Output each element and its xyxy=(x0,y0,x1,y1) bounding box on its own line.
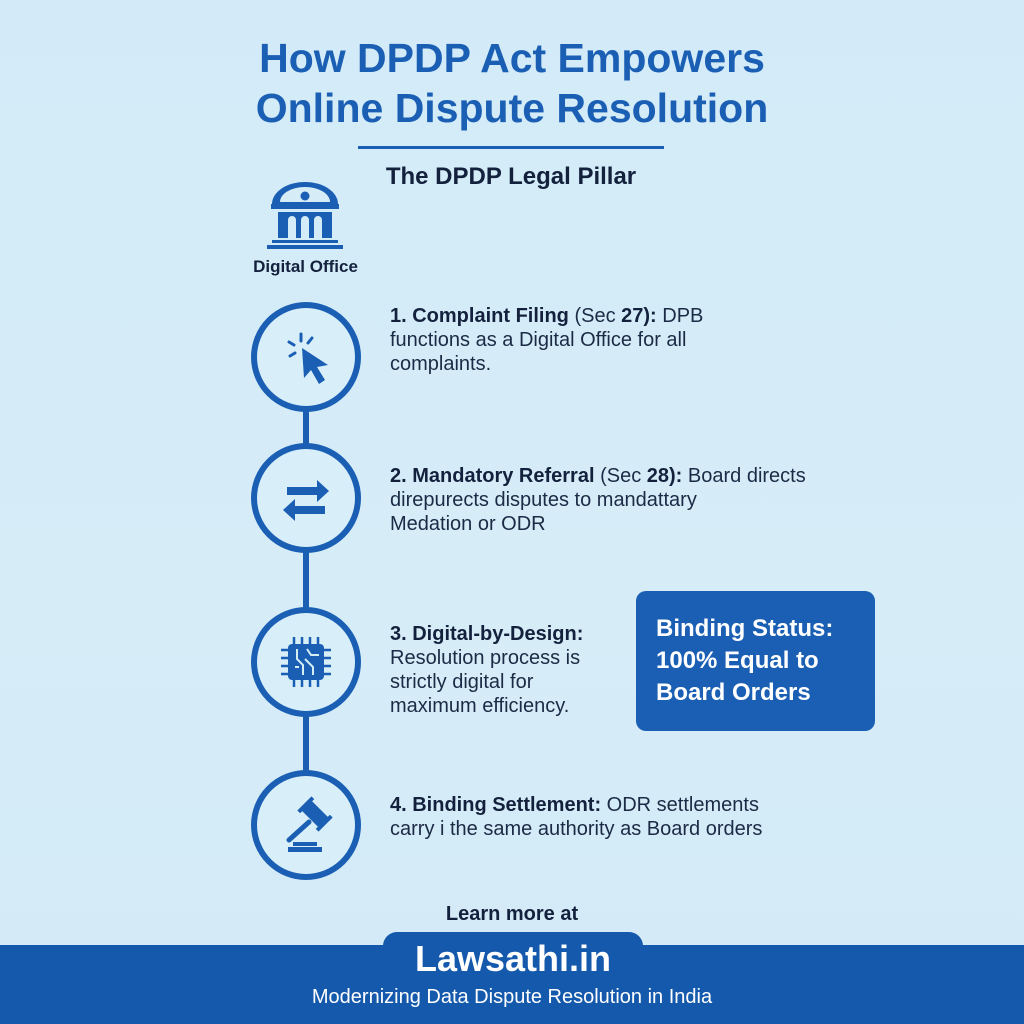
step 4 text: carry i the same authority as Board orders xyxy=(390,818,762,840)
callout: binding status xyxy=(636,591,875,731)
label: Digital Office: Digital Office xyxy=(253,257,358,276)
step 2 text: direpurects disputes to mandattary xyxy=(390,489,697,511)
step 1 text: complaints. xyxy=(390,353,491,375)
callout: binding status: 100% Equal to xyxy=(656,647,819,674)
icon circle 4: gavel xyxy=(251,770,361,880)
subtitle with rule xyxy=(358,146,664,190)
icon: digital office building xyxy=(267,182,343,249)
step 1 text xyxy=(390,305,703,375)
step 1 text: functions as a Digital Office for all xyxy=(390,329,686,351)
subtitle with rule: The DPDP Legal Pillar xyxy=(386,163,636,190)
step 3 text: strictly digital for xyxy=(390,671,533,693)
callout: binding status: Board Orders xyxy=(656,679,811,706)
timeline line xyxy=(303,400,309,800)
icon circle 3: chip xyxy=(251,607,361,717)
title: How DPDP Act Empowers xyxy=(259,35,765,81)
step 2 text xyxy=(390,465,806,535)
icon circle 2: exchange arrows xyxy=(251,443,361,553)
step 4 text xyxy=(390,794,762,840)
footer tab: Lawsathi.in xyxy=(383,932,643,984)
step 2 text: 2. Mandatory Referral (Sec 28): Board directs xyxy=(390,465,806,487)
footer band xyxy=(0,945,1024,1024)
callout: binding status: Binding Status: xyxy=(656,615,833,642)
footer tagline: Modernizing Data Dispute Resolution in India xyxy=(312,986,712,1008)
icon circle 1: cursor xyxy=(251,302,361,412)
step 3 text: maximum efficiency. xyxy=(390,695,569,717)
step 3 text: Resolution process is xyxy=(390,647,580,669)
step 2 text: Medation or ODR xyxy=(390,513,546,535)
step 1 text: 1. Complaint Filing (Sec 27): DPB xyxy=(390,305,703,327)
step 3 text xyxy=(390,623,583,717)
footer tab: Lawsathi.in: Lawsathi.in xyxy=(415,938,611,979)
learn more: Learn more at xyxy=(446,903,578,925)
step 4 text: 4. Binding Settlement: ODR settlements xyxy=(390,794,759,816)
title: Online Dispute Resolution xyxy=(256,85,768,131)
title xyxy=(256,35,768,131)
step 3 text: 3. Digital-by-Design: xyxy=(390,623,583,645)
